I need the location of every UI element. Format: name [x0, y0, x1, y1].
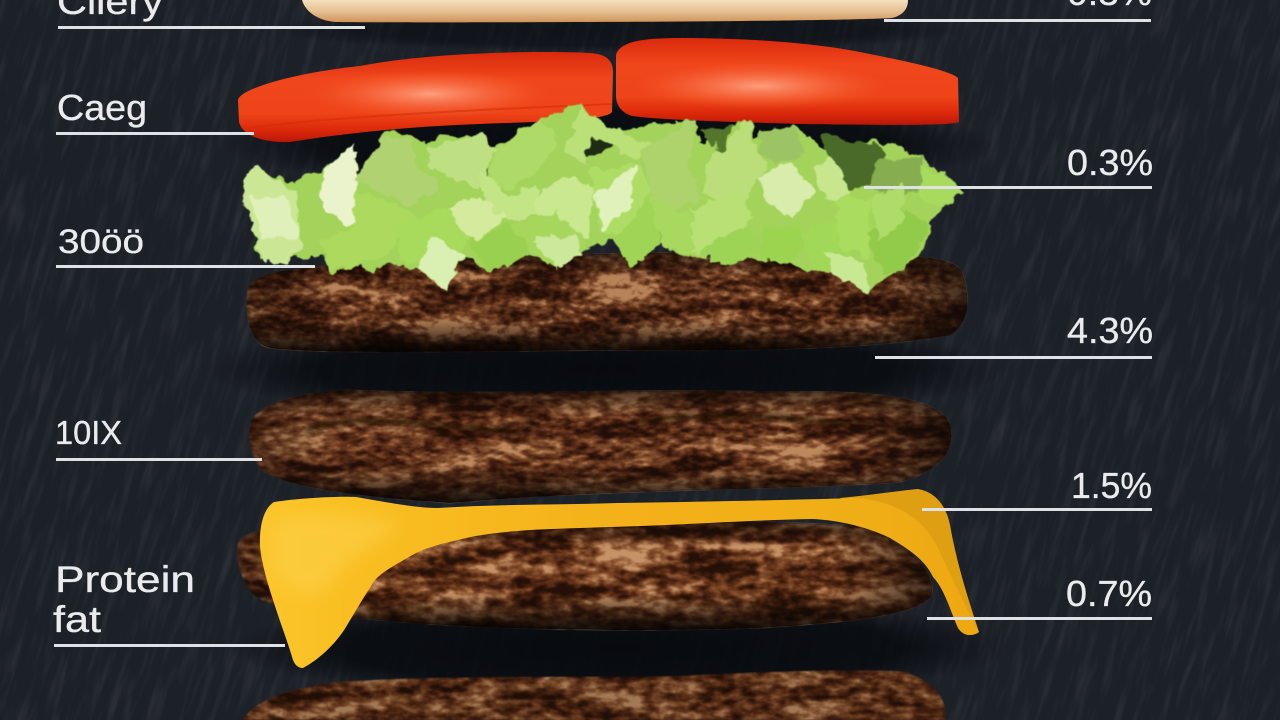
lettuce leaves: [243, 164, 302, 263]
left label: Protein fat: [53, 559, 285, 647]
cheese far drape: [840, 489, 979, 635]
left label: Protein fat: Protein: [55, 559, 195, 600]
right label: 0.3%: [864, 142, 1153, 189]
right label: top value 0.3%: [884, 0, 1152, 22]
right label: 1.5%: [922, 465, 1152, 511]
cheese main sheet: [260, 497, 979, 668]
right label: 0.7%: 0.7%: [1066, 573, 1152, 614]
left label: 30öö: [56, 223, 315, 268]
left label: 10IX: 10IX: [55, 414, 122, 451]
patty 2: [249, 390, 951, 503]
lettuce base silhouette: [244, 105, 964, 293]
cheese highlight: [272, 514, 400, 594]
left label: Cliery: [57, 0, 365, 29]
right label: 4.3%: 4.3%: [1067, 310, 1153, 351]
tomato slice right: [616, 38, 959, 125]
lettuce dark gaps: [585, 135, 615, 158]
cheese slice: [260, 489, 979, 668]
left label: 30öö: 30öö: [58, 223, 144, 261]
lettuce: [243, 105, 964, 293]
right label: 0.3%: 0.3%: [1067, 142, 1153, 183]
right label: 0.7%: [927, 573, 1152, 620]
patty 1: [247, 253, 967, 352]
left label: Protein fat: fat: [53, 599, 102, 640]
right label: 1.5%: 1.5%: [1071, 465, 1152, 506]
patty 4: [243, 670, 945, 720]
left label: Caeg: [56, 87, 254, 135]
patty 3: [238, 520, 932, 630]
tomato slice left: [238, 52, 613, 142]
left label: Caeg: Caeg: [57, 87, 147, 128]
right label: 4.3%: [875, 310, 1153, 359]
top bun: [302, 0, 908, 22]
left label: 10IX: [55, 414, 262, 461]
